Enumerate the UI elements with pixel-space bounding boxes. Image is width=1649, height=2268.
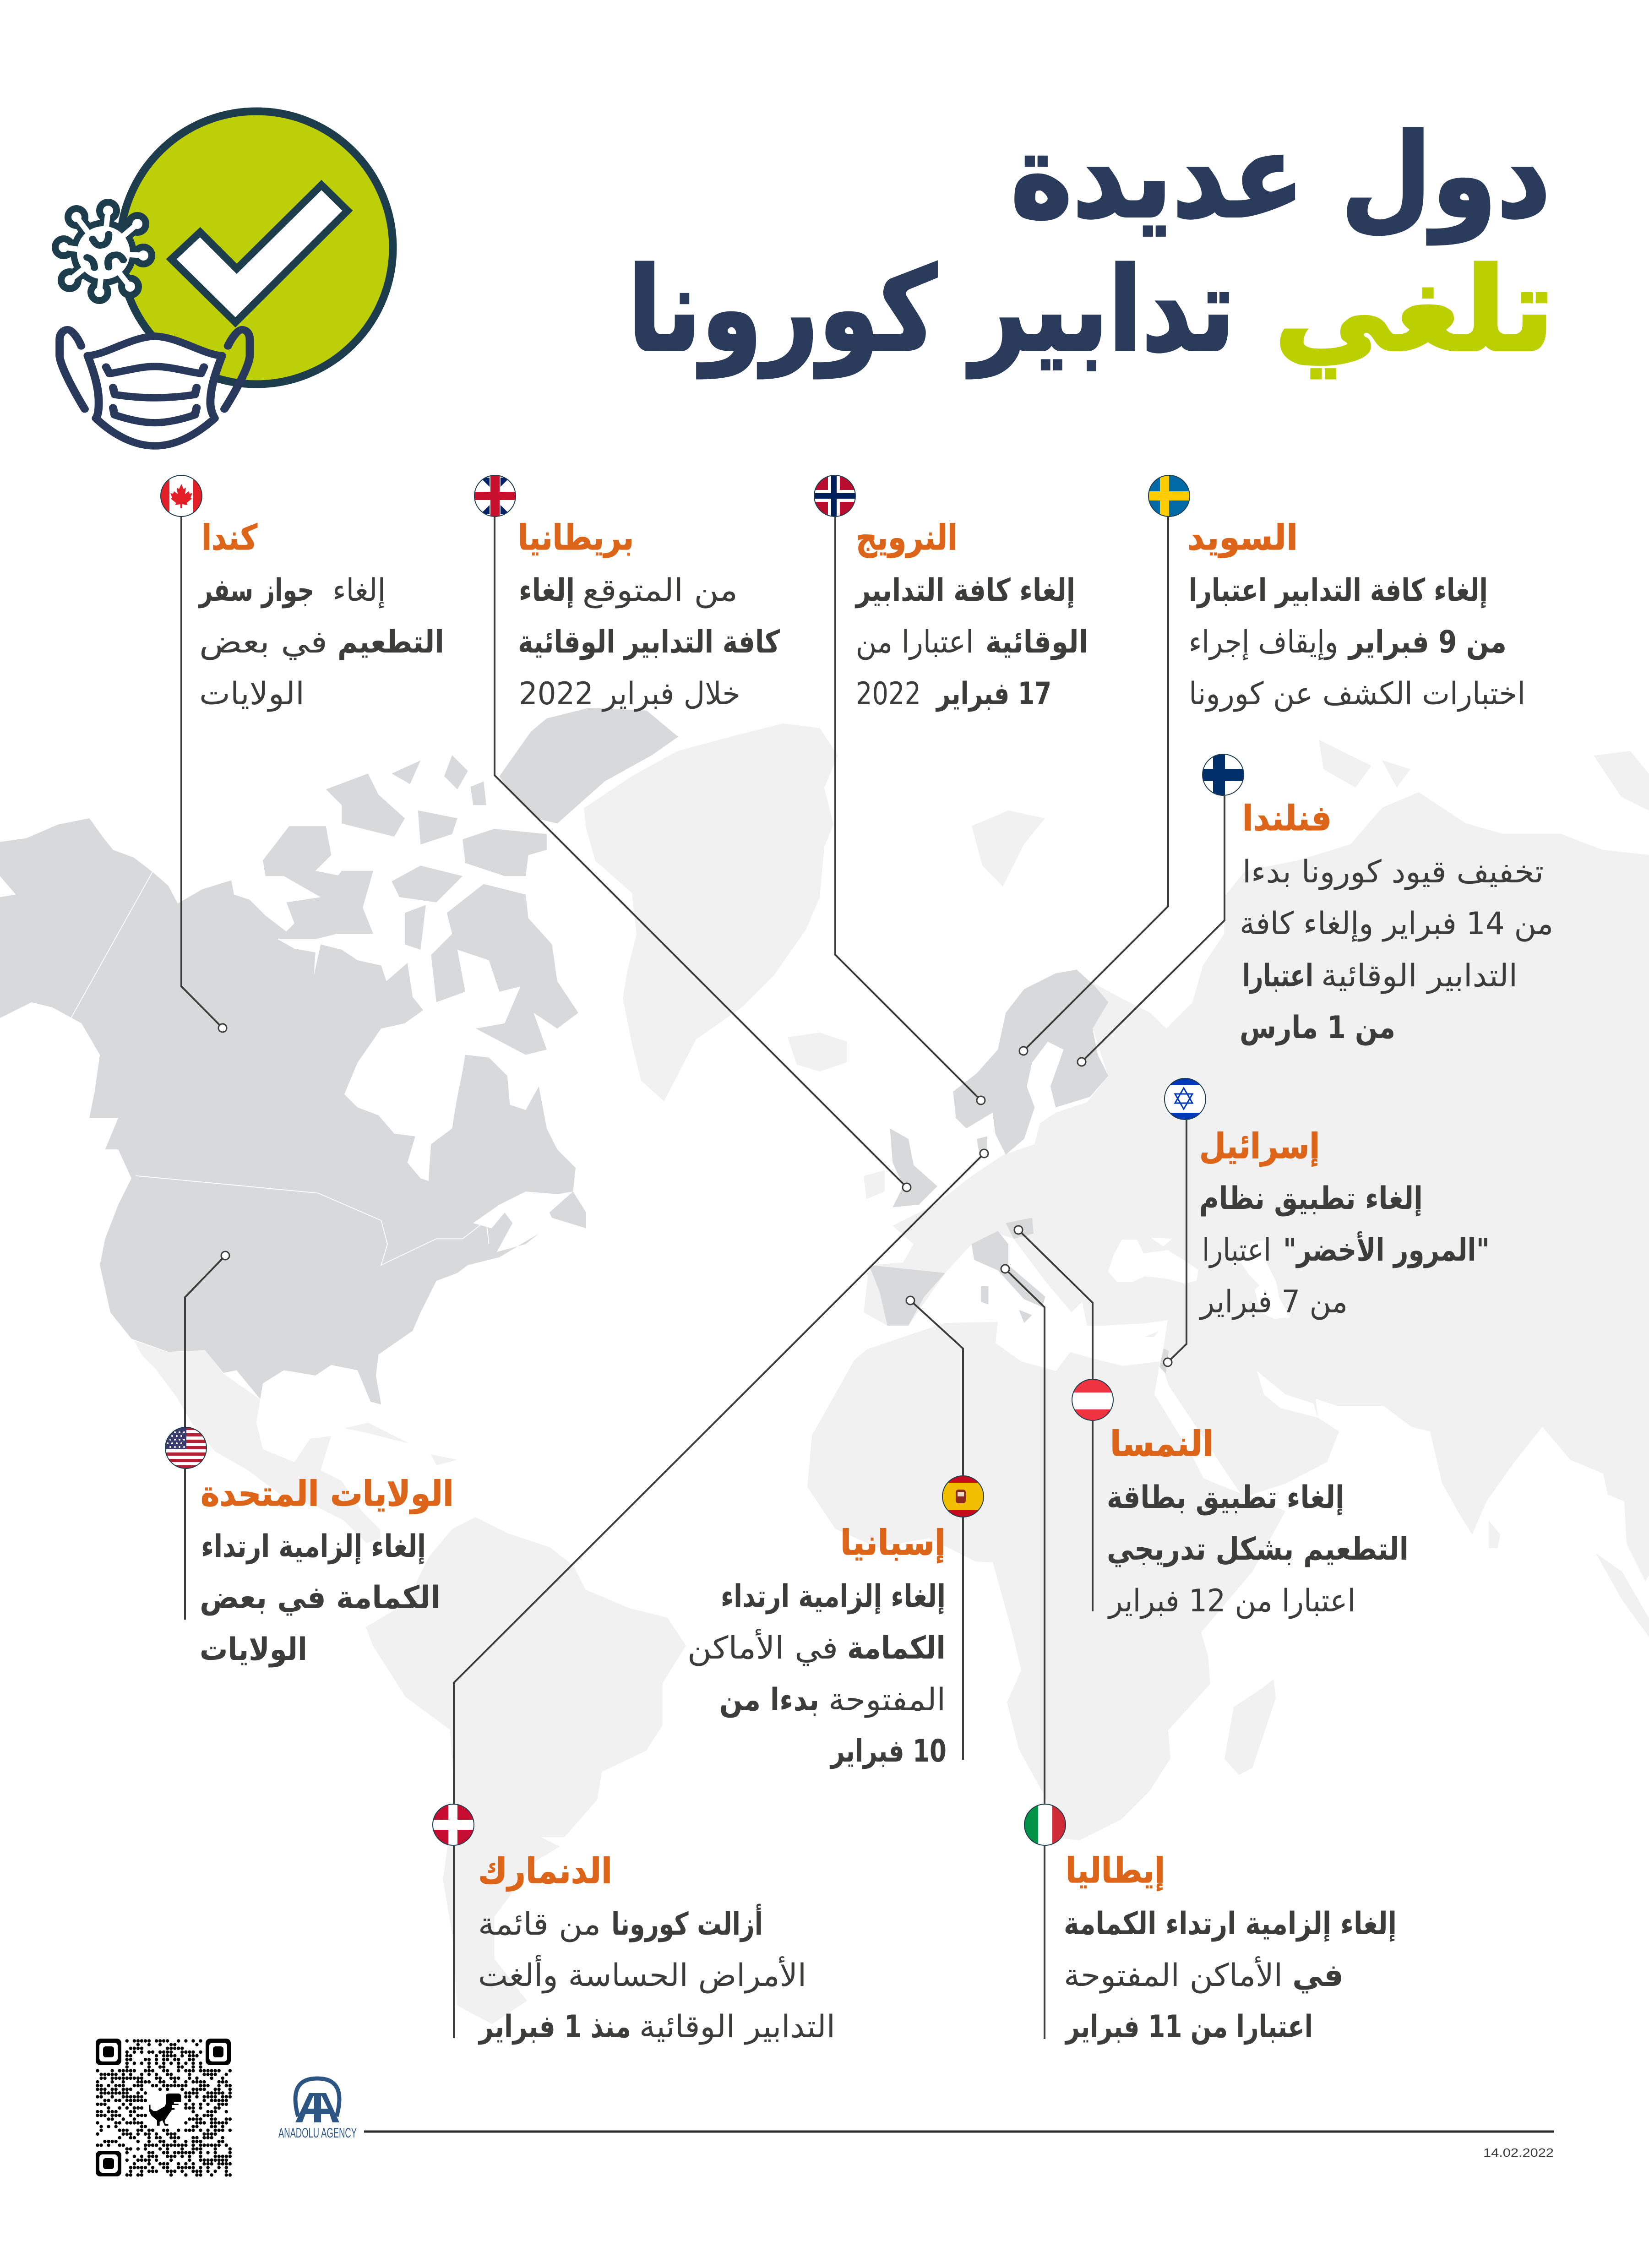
body: Denmark: من قائمة bbox=[478, 1906, 601, 1942]
logo wordmark: ANADOLU AGENCY bbox=[278, 2126, 357, 2141]
body: Canada: الولايات bbox=[199, 676, 305, 712]
body: Italy: الأماكن المفتوحة bbox=[1064, 1956, 1283, 1994]
card: Britain bbox=[474, 475, 911, 1191]
body: Norway: إلغاء كافة التدابير bbox=[855, 572, 1075, 609]
date: 14.02.2022 bbox=[1483, 2146, 1554, 2159]
body: Spain: الكمامة bbox=[847, 1630, 946, 1666]
body: Israel: من 7 فبراير bbox=[1199, 1284, 1348, 1320]
card: Spain bbox=[687, 1296, 984, 1769]
body: Austria bbox=[1107, 1479, 1409, 1619]
flag: United States bbox=[165, 1427, 207, 1469]
flag: Denmark bbox=[432, 1804, 474, 1846]
body: Spain: بدءا من bbox=[719, 1682, 819, 1718]
flag: Norway bbox=[814, 475, 856, 517]
title line 1: دول عديدة bbox=[1011, 109, 1551, 245]
card: Sweden bbox=[1019, 475, 1525, 1055]
title line 2: تدابير كورونا bbox=[628, 243, 1235, 378]
body: Spain: في الأماكن bbox=[687, 1629, 838, 1666]
body: Finland bbox=[1240, 854, 1553, 1046]
card: United States bbox=[165, 1251, 454, 1668]
title line 2 highlighted word: تلغي bbox=[1274, 243, 1555, 378]
heading: Denmark: الدنمارك bbox=[478, 1850, 612, 1892]
body: Sweden bbox=[1189, 572, 1525, 712]
body: Canada: في بعض bbox=[199, 624, 327, 660]
body: Sweden: إلغاء كافة التدابير اعتبارا bbox=[1189, 572, 1488, 609]
body: Austria: إلغاء تطبيق بطاقة bbox=[1107, 1479, 1344, 1516]
body: Canada: التطعيم bbox=[337, 624, 444, 660]
body: Italy: اعتبارا من 11 فبراير bbox=[1065, 2009, 1313, 2045]
body: Canada: إلغاء bbox=[332, 572, 386, 609]
body: Finland: تخفيف قيود كورونا بدءا bbox=[1242, 854, 1544, 890]
body: Italy bbox=[1064, 1906, 1397, 2045]
leader line: Norway bbox=[835, 517, 985, 1104]
body: United States: الكمامة في بعض bbox=[200, 1580, 441, 1616]
leader line: Spain bbox=[906, 1296, 963, 1760]
body: Finland: التدابير الوقائية bbox=[1321, 958, 1518, 994]
leader line: Canada bbox=[181, 517, 227, 1032]
leader line: Israel bbox=[1164, 1120, 1186, 1366]
body: Israel bbox=[1199, 1180, 1490, 1320]
flag: Britain bbox=[474, 475, 516, 517]
body: Norway: اعتبارا من bbox=[856, 624, 974, 660]
body: Canada bbox=[198, 572, 444, 712]
body: Israel: "المرور الأخضر" bbox=[1283, 1231, 1490, 1268]
QR finder patterns bbox=[96, 2039, 231, 2176]
body: Sweden: من 9 فبراير bbox=[1347, 624, 1507, 660]
body: Finland: اعتبارا bbox=[1242, 958, 1313, 994]
flag: Spain bbox=[942, 1475, 984, 1517]
heading: Sweden: السويد bbox=[1187, 517, 1298, 558]
heading: Canada: كندا bbox=[201, 517, 258, 558]
heading: Italy: إيطاليا bbox=[1066, 1850, 1165, 1891]
card: Denmark bbox=[432, 1149, 988, 2045]
heading: Israel: إسرائيل bbox=[1199, 1126, 1320, 1167]
icon: virus bbox=[52, 199, 155, 304]
heading: Britain: بريطانيا bbox=[518, 517, 634, 558]
flag: Austria bbox=[1072, 1379, 1114, 1421]
body: Denmark: منذ 1 فبراير bbox=[478, 2009, 631, 2045]
icon: lime circle bbox=[120, 111, 393, 384]
body: Spain: المفتوحة bbox=[828, 1682, 946, 1718]
body: Spain bbox=[687, 1578, 947, 1769]
card: Israel bbox=[1164, 1078, 1490, 1366]
heading: United States: الولايات المتحدة bbox=[201, 1473, 454, 1514]
body: United States bbox=[200, 1528, 441, 1668]
leader line: Austria bbox=[1014, 1226, 1093, 1611]
body: Denmark: أزالت كورونا bbox=[611, 1904, 763, 1942]
body: Britain bbox=[518, 572, 780, 712]
body: Norway: الوقائية bbox=[985, 624, 1088, 660]
body: Norway: 17 فبراير bbox=[936, 676, 1051, 712]
body: Britain: إلغاء bbox=[519, 572, 575, 609]
flag: Israel bbox=[1164, 1078, 1206, 1120]
body: Canada: جواز سفر bbox=[198, 572, 314, 609]
body: Sweden: اختبارات الكشف عن كورونا bbox=[1189, 676, 1525, 712]
leader line: Sweden bbox=[1019, 517, 1168, 1055]
body: Sweden: وإيقاف إجراء bbox=[1189, 624, 1338, 660]
leader line: Britain bbox=[495, 517, 911, 1191]
QR code bbox=[96, 2039, 231, 2176]
icon: check mark bbox=[171, 185, 348, 322]
card: Canada bbox=[160, 475, 444, 1032]
body: United States: إلغاء إلزامية ارتداء bbox=[201, 1528, 426, 1565]
QR data modules bbox=[98, 2041, 230, 2175]
leader line: United States bbox=[185, 1251, 229, 1620]
world map background bbox=[0, 708, 1649, 2024]
logo AA letters bbox=[295, 2093, 339, 2122]
icon: check circle, virus and mask bbox=[52, 111, 393, 446]
logo arc bbox=[295, 2078, 339, 2116]
title bbox=[628, 109, 1555, 378]
body: Spain: إلغاء إلزامية ارتداء bbox=[721, 1578, 946, 1615]
leader line: Denmark bbox=[454, 1149, 988, 2038]
body: Spain: 10 فبراير bbox=[830, 1733, 947, 1769]
heading: Spain: إسبانيا bbox=[840, 1522, 946, 1563]
body: Britain: كافة التدابير الوقائية bbox=[518, 624, 780, 660]
body: United States: الولايات bbox=[200, 1632, 307, 1668]
body: Austria: التطعيم بشكل تدريجي bbox=[1107, 1531, 1409, 1567]
leader line: Italy bbox=[1001, 1265, 1045, 2039]
card: Finland bbox=[1078, 754, 1553, 1066]
heading: Austria: النمسا bbox=[1110, 1423, 1214, 1464]
QR centre dinosaur bbox=[149, 2094, 181, 2126]
flag: Finland bbox=[1202, 754, 1244, 796]
body: Finland: من 14 فبراير وإلغاء كافة bbox=[1240, 906, 1553, 942]
body: Italy: إلغاء إلزامية ارتداء الكمامة bbox=[1064, 1906, 1397, 1942]
heading: Norway: النرويج bbox=[856, 517, 958, 558]
leader line: Finland bbox=[1078, 796, 1225, 1066]
body: Britain: من المتوقع bbox=[582, 572, 738, 609]
flag: Italy bbox=[1024, 1804, 1066, 1846]
body: Israel: إلغاء تطبيق نظام bbox=[1199, 1180, 1423, 1217]
card: Italy bbox=[1001, 1265, 1397, 2045]
body: Denmark: الأمراض الحساسة وألغت bbox=[478, 1955, 806, 1994]
icon: face mask bbox=[60, 330, 250, 446]
flag: Sweden bbox=[1148, 475, 1190, 517]
body: Israel: اعتبارا bbox=[1202, 1232, 1271, 1268]
flag: Canada bbox=[160, 475, 202, 517]
body: Norway bbox=[855, 572, 1088, 712]
body: Austria: اعتبارا من 12 فبراير bbox=[1107, 1583, 1355, 1619]
body: Britain: خلال فبراير 2022 bbox=[519, 676, 740, 712]
body: Denmark: التدابير الوقائية bbox=[639, 2009, 835, 2045]
body: Finland: من 1 مارس bbox=[1240, 1010, 1395, 1046]
body: Italy: في bbox=[1292, 1958, 1344, 1994]
logo: Anadolu Agency bbox=[278, 2078, 357, 2141]
body: Norway: 2022 bbox=[856, 676, 921, 712]
body: Denmark bbox=[478, 1904, 835, 2045]
card: Norway bbox=[814, 475, 1088, 1104]
heading: Finland: فنلندا bbox=[1242, 798, 1332, 838]
card: Austria bbox=[1014, 1226, 1409, 1619]
footer rule bbox=[364, 2130, 1554, 2133]
